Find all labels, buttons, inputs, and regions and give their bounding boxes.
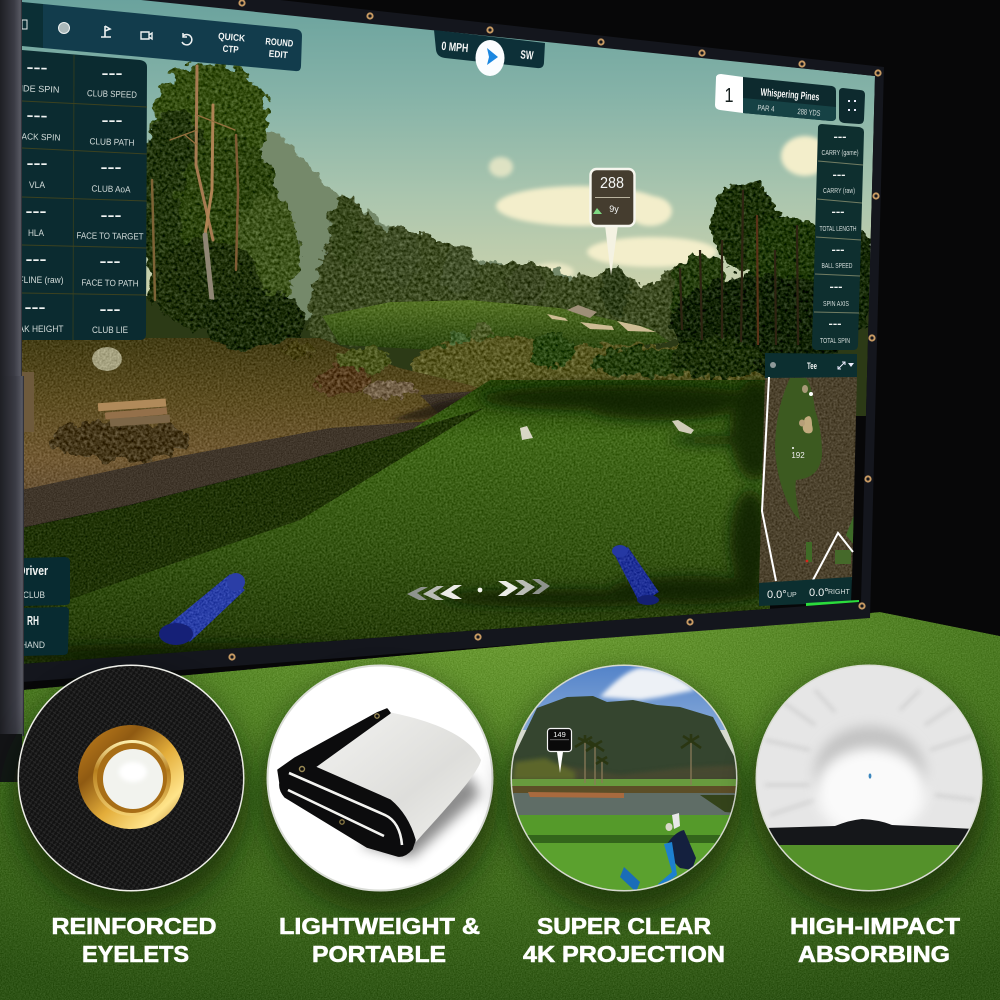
column: ball data: --- bbox=[26, 155, 48, 171]
toolbar labels: CTP bbox=[222, 44, 240, 56]
black bottom band bbox=[765, 819, 975, 846]
mid fairway hill bbox=[322, 300, 670, 352]
column: club data: FACE TO PATH bbox=[81, 278, 139, 288]
column: club data: CLUB LIE bbox=[92, 325, 128, 335]
label: lightweight and portable: PORTABLE bbox=[312, 941, 446, 967]
impact dent shadow bbox=[815, 726, 925, 818]
aerial map bbox=[755, 376, 860, 586]
club selector bbox=[18, 557, 70, 606]
sky bbox=[0, 0, 900, 305]
hole info card: Whispering Pines bbox=[760, 86, 820, 104]
tree trunks bbox=[152, 66, 238, 300]
column: ball data: --- bbox=[26, 251, 47, 267]
turf below bbox=[755, 845, 985, 895]
toolbar labels: QUICK bbox=[218, 31, 246, 45]
right tree trunks bbox=[680, 190, 798, 350]
far tree line bbox=[306, 194, 686, 347]
hand selector: HAND bbox=[21, 640, 45, 650]
column: club data: --- bbox=[100, 253, 121, 269]
stat rows: --- bbox=[832, 169, 846, 181]
hole info card: 1 bbox=[724, 85, 734, 107]
circle: reinforced eyelet bbox=[13, 660, 249, 913]
black binding bbox=[278, 709, 415, 856]
fairway bbox=[0, 380, 770, 670]
circle: folded screen bbox=[262, 664, 498, 913]
column: club data: CLUB PATH bbox=[89, 136, 135, 148]
tee marker left bbox=[520, 426, 533, 440]
label: lightweight and portable bbox=[279, 913, 480, 967]
label: reinforced eyelets: REINFORCED bbox=[52, 913, 216, 939]
stat rows: TOTAL LENGTH bbox=[820, 224, 856, 233]
toolbar labels: ROUND bbox=[265, 36, 294, 50]
toolbar labels: EDIT bbox=[268, 49, 288, 61]
column: ball data: AK HEIGHT bbox=[18, 324, 64, 334]
fairway shadows bbox=[0, 380, 780, 667]
map footer bbox=[759, 577, 852, 606]
column: club data: --- bbox=[100, 301, 121, 317]
column: club data: CLUB AoA bbox=[91, 183, 131, 195]
near fairway bbox=[505, 815, 745, 840]
top eyelets bbox=[229, 0, 881, 660]
label: lightweight and portable: LIGHTWEIGHT & bbox=[279, 913, 480, 939]
right pine trees bbox=[670, 180, 876, 375]
column: ball data: ACK SPIN bbox=[21, 131, 61, 143]
stat rows: --- bbox=[830, 281, 843, 293]
dark room wall bbox=[0, 0, 1000, 700]
column: ball data: --- bbox=[26, 59, 48, 75]
stat rows: --- bbox=[828, 318, 842, 330]
column: ball data bbox=[18, 59, 64, 334]
right stats panel bbox=[812, 124, 864, 350]
club selector: CLUB bbox=[23, 590, 45, 600]
column: club data: --- bbox=[100, 207, 122, 223]
white fold stripes bbox=[288, 773, 402, 845]
right blue tee pad bbox=[612, 545, 659, 605]
frame pole bbox=[0, 0, 24, 782]
column: ball data: --- bbox=[26, 107, 48, 123]
column: ball data: FLINE (raw) bbox=[18, 275, 64, 285]
stat rows: --- bbox=[832, 244, 845, 256]
hazy hillside forest bbox=[259, 132, 572, 320]
distance marker: 9y bbox=[609, 204, 619, 214]
hole map panel: 0.0° bbox=[767, 589, 787, 601]
stat rows: CARRY (game) bbox=[822, 148, 859, 157]
hole info card: 288 YDS bbox=[797, 107, 821, 118]
aim chevrons bbox=[407, 579, 550, 600]
impact dent bbox=[816, 748, 926, 836]
left blue tee pad bbox=[159, 570, 248, 645]
icon: wind direction bbox=[476, 40, 504, 76]
hole map panel: 0.0° bbox=[809, 587, 829, 599]
mountain bbox=[512, 696, 736, 780]
icon: ball bbox=[58, 22, 70, 34]
distance marker small bbox=[548, 728, 572, 773]
toolbar labels bbox=[216, 31, 294, 62]
icon: flag bbox=[101, 26, 111, 37]
projected golf scene bbox=[0, 0, 900, 670]
path shadow bbox=[392, 395, 466, 422]
sand bunkers bbox=[547, 305, 656, 332]
wind panel bbox=[434, 30, 545, 76]
palm trees bbox=[575, 734, 701, 785]
label: reinforced eyelets bbox=[52, 913, 216, 967]
column: club data: FACE TO TARGET bbox=[76, 230, 144, 242]
column: club data: CLUB SPEED bbox=[87, 88, 138, 100]
rock bbox=[92, 347, 122, 371]
green power bar bbox=[806, 600, 859, 606]
aerial map: 192 bbox=[791, 451, 805, 460]
stacked logs bbox=[98, 398, 170, 427]
left stats panel bbox=[18, 50, 147, 340]
stat rows: SPIN AXIS bbox=[823, 299, 849, 308]
clouds bbox=[489, 136, 829, 281]
club selector: Driver bbox=[18, 563, 48, 578]
far green bbox=[505, 779, 745, 788]
label: high-impact absorbing: HIGH-IMPACT bbox=[790, 913, 960, 939]
ball mark bbox=[869, 773, 871, 779]
column: club data: --- bbox=[102, 65, 123, 81]
folded sheet bbox=[315, 712, 481, 842]
stat rows bbox=[820, 131, 859, 345]
distance marker: 288 bbox=[600, 175, 624, 192]
hole info card bbox=[715, 74, 836, 121]
label: super clear 4K projection: 4K PROJECTION bbox=[523, 941, 725, 967]
gravel cart path bbox=[24, 392, 472, 528]
label: high-impact absorbing: ABSORBING bbox=[798, 941, 950, 967]
hand selector bbox=[21, 607, 69, 656]
water bbox=[505, 793, 745, 816]
artificial turf floor bbox=[0, 612, 1000, 1000]
icon: gold grommet bbox=[78, 725, 184, 829]
fullscreen button bbox=[839, 88, 865, 124]
stat rows: CARRY (raw) bbox=[823, 186, 855, 195]
column: club data bbox=[76, 65, 144, 335]
label: reinforced eyelets: EYELETS bbox=[82, 941, 189, 967]
ground base bbox=[145, 296, 869, 416]
hand selector: RH bbox=[27, 613, 39, 628]
column: club data: --- bbox=[100, 159, 122, 175]
map white boundary lines bbox=[762, 377, 853, 581]
column: club data: --- bbox=[102, 112, 123, 128]
hole map panel bbox=[755, 353, 860, 606]
stat rows: --- bbox=[834, 131, 847, 143]
label: high-impact absorbing bbox=[790, 913, 960, 967]
column: ball data: --- bbox=[24, 299, 46, 315]
rock island bbox=[505, 786, 745, 794]
hole info card: PAR 4 bbox=[757, 103, 775, 114]
label: super clear 4K projection: SUPER CLEAR bbox=[537, 913, 711, 939]
column: ball data: VLA bbox=[29, 180, 45, 190]
distance marker bbox=[590, 169, 634, 276]
wind panel: SW bbox=[520, 47, 534, 63]
map header bbox=[765, 353, 857, 378]
screen border with eyelets bbox=[22, 0, 884, 682]
dirt embankment bbox=[22, 338, 478, 490]
stat rows: --- bbox=[832, 206, 845, 218]
toolbar bbox=[22, 2, 302, 71]
left foreground trees bbox=[146, 62, 306, 338]
column: ball data: IDE SPIN bbox=[20, 83, 60, 95]
log pile bbox=[312, 366, 416, 399]
column: ball data: HLA bbox=[28, 228, 44, 238]
sky and cloud bbox=[522, 666, 726, 730]
tee marker right bbox=[672, 420, 694, 434]
golf bag bbox=[620, 813, 696, 892]
scrub bushes bbox=[50, 288, 391, 460]
hole map panel: Tee bbox=[807, 361, 817, 372]
icon: camera bbox=[141, 32, 152, 39]
label: super clear 4K projection bbox=[523, 913, 725, 967]
stat rows: TOTAL SPIN bbox=[820, 336, 850, 345]
tree stump bbox=[21, 372, 34, 432]
distance marker small: 149 bbox=[553, 730, 566, 739]
hole map panel: RIGHT bbox=[828, 589, 850, 596]
product shadow bbox=[360, 775, 480, 858]
dark rough strip bbox=[24, 408, 484, 608]
wind panel: 0 MPH bbox=[441, 39, 469, 55]
circle: high-impact screen bbox=[751, 662, 987, 913]
column: ball data: --- bbox=[26, 203, 47, 219]
wrinkles bbox=[765, 690, 975, 815]
hole map panel: UP bbox=[787, 592, 797, 599]
midground bushes and slope bbox=[410, 322, 765, 388]
stat rows: BALL SPEED bbox=[822, 261, 853, 270]
icon: undo bbox=[182, 33, 192, 45]
circle: 4K projection scene bbox=[505, 660, 745, 913]
